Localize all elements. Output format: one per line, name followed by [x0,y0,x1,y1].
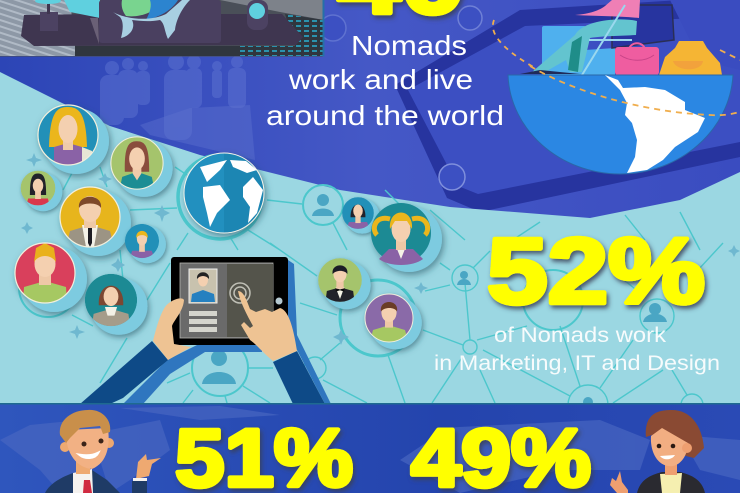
avatar: man on red [15,243,87,312]
background tablet outline [320,0,740,212]
ship with whale and globe [21,0,303,46]
left sleeve [80,341,168,404]
orbit path around the globe, rear [493,20,535,68]
avatar: man on purple [365,294,422,349]
chair back suitcase [582,48,615,75]
network person icons [202,194,667,407]
list lines [189,311,217,332]
left hand [153,298,191,360]
heading text: Nomads work and live around the world: around the world [266,100,504,131]
pink bag [615,43,659,75]
caption: 52% of Nomads: in Marketing, IT and Design [434,352,720,375]
avatar: small woman, right [342,197,380,234]
avatar: brown-haired woman [111,137,173,197]
blue tablet stand [123,258,331,404]
woman gesturing [610,410,705,493]
statistic: 52%: 52% [487,219,705,323]
right hand [238,291,297,361]
bottom band [0,403,740,493]
right sleeve [273,351,325,404]
chair leg [582,5,632,75]
caption: 52% of Nomads: of Nomads work [494,324,667,347]
avatar: small blonde person [125,224,166,263]
faint world map [0,406,740,493]
profile photo [189,269,217,303]
avatar: man with bow tie [318,258,371,309]
half globe [508,75,733,174]
avatar: man on yellow [60,187,131,256]
tablet body [171,257,288,345]
tablet held by hands [80,257,331,404]
pink shoe and skirt [575,0,640,18]
tablet screen [180,263,273,338]
orbit path in front of the globe [530,50,740,115]
laptop behind [612,5,674,48]
caption: 52% of Nomads [434,324,720,375]
walkway behind silhouettes [140,105,255,160]
blue suitcase [542,26,586,75]
small button [276,298,282,304]
chair seat dark feet [520,70,580,74]
heading text: Nomads work and live around the world: Nomads [351,30,467,61]
avatar: small dark-haired woman [21,171,62,211]
teal network background [0,72,740,404]
silhouettes of people [100,54,246,140]
heading text: Nomads work and live around the world: work and live [288,64,473,95]
South America [605,75,705,173]
avatar: woman on teal [85,274,148,335]
yellow bag [659,41,722,75]
network lines and nodes [19,155,723,425]
touch ripple [230,283,250,303]
teal trousers [532,19,637,72]
heading text: Nomads work and live around the world [266,30,504,131]
globe [184,153,264,233]
top photo panel [0,0,324,56]
avatar: girl with pigtails [371,203,442,272]
man pointing [45,410,161,493]
sparkle stars [21,153,740,345]
avatar: blonde woman [38,105,109,174]
half globe with luggage and traveller [508,0,733,174]
